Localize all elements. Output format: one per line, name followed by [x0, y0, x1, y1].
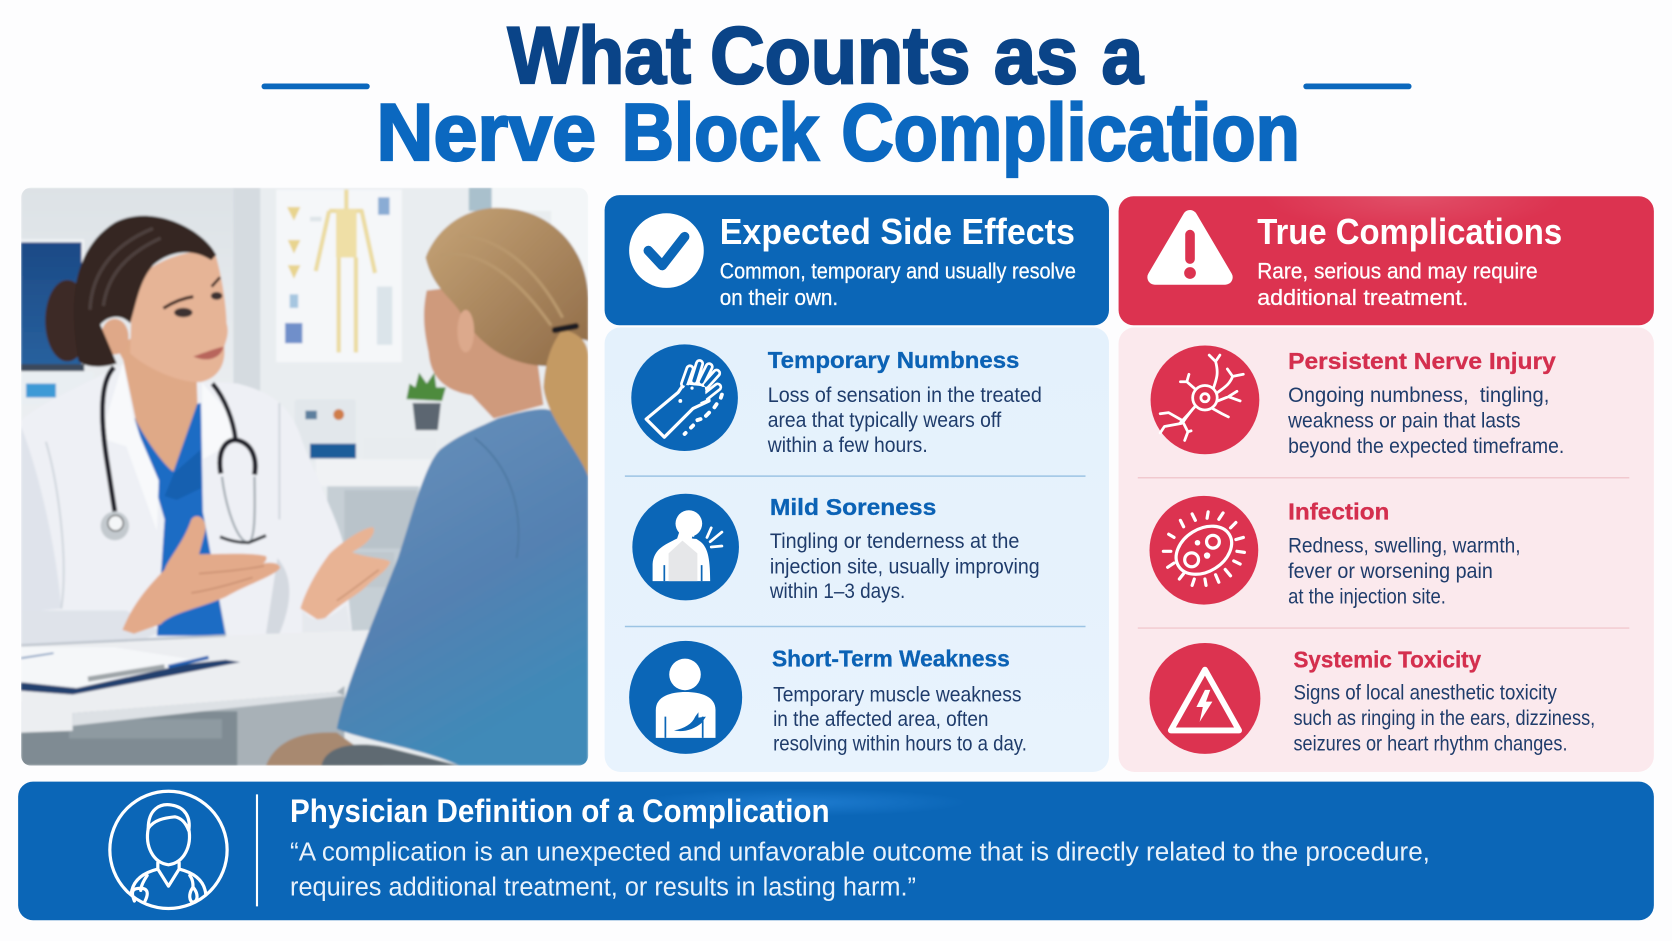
title accent right — [1306, 84, 1409, 89]
body text — [769, 530, 1040, 603]
neck — [115, 333, 199, 472]
title line 2 — [376, 88, 1300, 178]
title line 2: Nerve — [376, 88, 596, 178]
header subtitle — [720, 258, 1076, 310]
header subtitle: Common, temporary and usually resolve — [720, 258, 1076, 283]
title line 2: Block — [622, 88, 820, 178]
title line 2: Complication — [841, 88, 1300, 178]
body text — [773, 684, 1027, 756]
heading: Infection — [1288, 498, 1389, 524]
cabinet — [327, 486, 419, 634]
stethoscope — [102, 367, 115, 512]
heading: Short-Term Weakness — [772, 645, 1010, 671]
body text: Loss of sensation in the treated — [768, 384, 1042, 407]
machine — [295, 399, 356, 461]
hair — [74, 216, 216, 367]
body text: Tingling or tenderness at the — [770, 530, 1019, 553]
body text — [1288, 534, 1521, 609]
chair and trousers — [266, 732, 354, 766]
panel: true complications — [1119, 196, 1654, 772]
title line 1: Counts — [710, 11, 970, 101]
body text: injection site, usually improving — [770, 556, 1040, 579]
header title: Expected Side Effects — [720, 211, 1075, 252]
body text: fever or worsening pain — [1288, 560, 1493, 583]
patient hair — [426, 208, 588, 366]
body text: Signs of local anesthetic toxicity — [1293, 682, 1557, 705]
bun — [44, 279, 80, 362]
title line 1 — [508, 11, 1144, 101]
body text: within a few hours. — [767, 434, 928, 457]
sweater — [337, 409, 588, 766]
banner heading: Physician Definition of a Complication — [290, 793, 830, 829]
title line 1: as — [994, 11, 1078, 101]
panel header — [1119, 196, 1654, 325]
coat — [232, 383, 352, 630]
item: mild soreness — [632, 494, 1040, 603]
header subtitle: on their own. — [720, 285, 838, 310]
body text: area that typically wears off — [768, 409, 1001, 432]
hands — [122, 516, 280, 634]
panel body — [605, 327, 1109, 772]
icon: bacterium — [1149, 496, 1258, 605]
poster — [276, 190, 402, 362]
icon: numb arm — [631, 344, 738, 451]
body text: beyond the expected timeframe. — [1288, 435, 1564, 458]
title line 1: What — [508, 11, 691, 101]
body text: in the affected area, often — [773, 708, 988, 731]
body text: resolving within hours to a day. — [773, 733, 1027, 756]
item: systemic toxicity — [1149, 643, 1595, 756]
icon: warning triangle — [1155, 218, 1225, 279]
icon: check mark — [629, 213, 704, 288]
body text: such as ringing in the ears, dizziness, — [1293, 707, 1595, 730]
body text — [1293, 682, 1595, 756]
title — [376, 11, 1300, 178]
item: infection — [1149, 496, 1521, 609]
body text — [1287, 384, 1564, 458]
item: persistent nerve injury — [1151, 345, 1564, 458]
header subtitle: additional treatment. — [1257, 285, 1468, 310]
body text: within 1–3 days. — [769, 580, 905, 603]
banner background — [18, 782, 1654, 920]
heading: Persistent Nerve Injury — [1288, 348, 1556, 374]
face — [130, 252, 228, 382]
patient neck — [424, 287, 543, 418]
title line 1: a — [1102, 11, 1144, 101]
lapels — [106, 370, 161, 522]
header subtitle — [1257, 258, 1538, 310]
desk top — [21, 630, 373, 733]
clipboard — [21, 660, 240, 695]
title accent left — [264, 84, 367, 89]
header subtitle: Rare, serious and may require — [1257, 258, 1538, 283]
body text: at the injection site. — [1288, 586, 1446, 609]
plant — [413, 403, 441, 430]
item: short-term weakness — [629, 641, 1027, 756]
panel: physician definition — [18, 782, 1654, 920]
scrubs — [135, 403, 226, 636]
icon: sore shoulder — [632, 494, 739, 600]
item: temporary numbness — [631, 344, 1042, 457]
body text: seizures or heart rhythm changes. — [1293, 733, 1567, 756]
body text: Ongoing numbness, tingling, — [1288, 384, 1549, 407]
heading: Temporary Numbness — [768, 347, 1019, 373]
quote: requires additional treatment, or results in lasting harm.” — [290, 874, 916, 902]
icon: electric hazard triangle — [1149, 643, 1260, 754]
body text: weakness or pain that lasts — [1287, 410, 1521, 433]
desk body — [206, 686, 346, 766]
photo: doctor talking with patient — [21, 188, 588, 766]
header title: True Complications — [1257, 211, 1562, 252]
panel header — [605, 195, 1109, 325]
icon: neuron — [1151, 345, 1259, 454]
heading: Systemic Toxicity — [1293, 647, 1481, 673]
quote: “A complication is an unexpected and unfavorable outcome that is directly related to the procedure, — [290, 839, 1430, 867]
monitor — [22, 239, 84, 262]
panel body — [1119, 327, 1654, 772]
quote — [290, 839, 1430, 902]
body text: Temporary muscle weakness — [773, 684, 1022, 707]
icon: person with weak arm — [629, 641, 742, 754]
eyes, brows, lips — [163, 297, 193, 308]
divider — [256, 794, 258, 906]
body text: Redness, swelling, warmth, — [1288, 534, 1521, 557]
body text — [767, 384, 1042, 457]
icon: physician — [110, 791, 227, 909]
panel: expected side effects — [605, 195, 1109, 772]
heading: Mild Soreness — [770, 494, 936, 520]
